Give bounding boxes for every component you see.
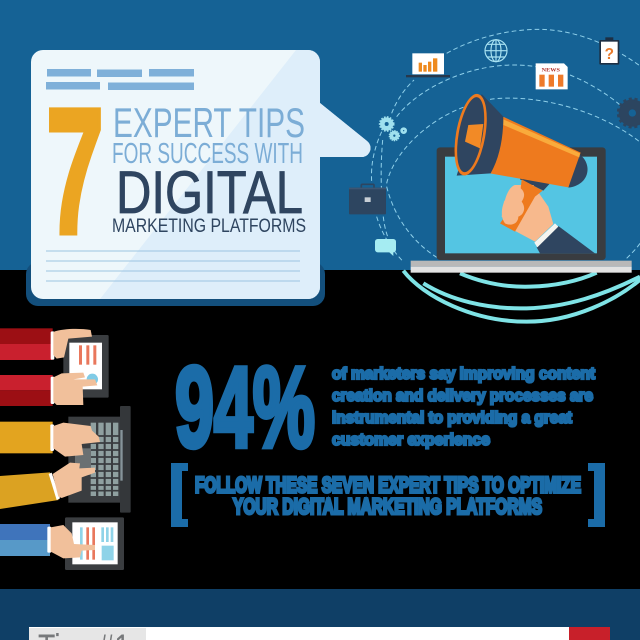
dark collar bbox=[457, 94, 503, 176]
laptop lid edge bbox=[120, 406, 131, 513]
blue sleeve bbox=[0, 524, 50, 540]
card shadow bbox=[26, 262, 325, 306]
megaphone bbox=[449, 91, 588, 188]
card diagonal sheen bbox=[100, 50, 371, 299]
tablet screen bbox=[69, 343, 102, 389]
cyan signal waves below laptop bbox=[403, 271, 640, 322]
title line: expert tips: EXPERT TIPS bbox=[113, 99, 305, 146]
cuffs bbox=[51, 331, 54, 360]
keyboard keys bbox=[91, 423, 118, 496]
statistic description: of marketers say improving content bbox=[332, 365, 595, 383]
big numeral 7: 7 bbox=[46, 71, 104, 271]
jacket sleeve bbox=[537, 226, 595, 253]
bottom hand bbox=[53, 373, 97, 405]
icon: cyan gears bbox=[380, 117, 406, 141]
illustration: megaphone from laptop with orbiting icons bbox=[349, 29, 640, 322]
top hand bbox=[53, 329, 92, 359]
right bracket bbox=[588, 463, 605, 527]
mouth inner bbox=[452, 95, 489, 174]
lower hand bbox=[53, 463, 95, 498]
callout text bbox=[195, 472, 581, 519]
laptop screen frame bbox=[437, 147, 606, 260]
body highlight bbox=[503, 119, 580, 157]
mouth rim bbox=[449, 91, 492, 178]
icon: globe bbox=[485, 40, 507, 62]
statistic description: customer experience bbox=[332, 431, 490, 449]
megaphone handle mount bbox=[520, 173, 551, 191]
tablet screen bbox=[72, 522, 118, 564]
chart bars bbox=[79, 345, 96, 365]
top sleeve bbox=[0, 328, 53, 344]
callout: bracketed intro bbox=[171, 463, 605, 527]
statistic: 94%: 94% bbox=[175, 344, 315, 472]
bottom sleeve bbox=[0, 375, 53, 390]
title line: marketing platforms: MARKETING PLATFORMS bbox=[112, 216, 306, 237]
angled yellow sleeve bbox=[0, 472, 59, 509]
shirt cuff bbox=[534, 223, 558, 247]
straight yellow sleeve bbox=[0, 422, 53, 453]
tablet body bbox=[63, 335, 109, 398]
cuffs bbox=[50, 424, 54, 451]
statistic description: creation and delivery processes are bbox=[332, 387, 593, 405]
hand holding megaphone bbox=[500, 173, 595, 253]
hand back bbox=[502, 185, 553, 242]
ruled lines bbox=[46, 251, 300, 281]
rear cap bbox=[568, 153, 588, 188]
header placeholder bars bbox=[46, 69, 194, 90]
red accent block bbox=[569, 627, 610, 640]
laptop base bbox=[411, 261, 632, 273]
header bar white bbox=[29, 627, 610, 640]
icon: briefcase bbox=[349, 184, 386, 214]
panel: tip 1 header bbox=[29, 627, 610, 640]
card body with pointer bbox=[31, 50, 371, 299]
megaphone handle bbox=[500, 179, 543, 232]
hinge highlight bbox=[120, 430, 123, 481]
laptop deck bbox=[68, 417, 121, 503]
speaker cone bbox=[465, 124, 483, 148]
icon: news sheet bbox=[536, 63, 568, 89]
touch blob bbox=[87, 374, 98, 385]
icon: chat bubble bbox=[375, 239, 396, 256]
icon: question clipboard bbox=[599, 37, 619, 65]
laptop screen bbox=[445, 157, 597, 253]
icon: news sheet: NEWS bbox=[542, 68, 560, 74]
tablet with two red-sleeved hands bbox=[0, 328, 109, 406]
upper hand bbox=[53, 423, 100, 457]
statistic description bbox=[332, 365, 595, 449]
cuff bbox=[47, 527, 51, 553]
fingers bbox=[502, 185, 524, 225]
left bracket bbox=[171, 463, 188, 527]
tablet body bbox=[65, 517, 124, 570]
hand bbox=[51, 525, 95, 558]
dashed orbit arcs bbox=[371, 29, 640, 262]
icon: chart on small laptop bbox=[406, 53, 450, 77]
orange body bbox=[490, 116, 581, 187]
title line: digital: DIGITAL bbox=[116, 159, 303, 226]
trackpad bbox=[75, 448, 91, 475]
statistic description: instrumental to providing a great bbox=[332, 409, 572, 427]
illustration: hands using devices bbox=[0, 328, 131, 570]
key gaps bbox=[90, 436, 119, 491]
tip label background bbox=[29, 628, 146, 640]
panel: title speech-bubble card bbox=[26, 50, 371, 306]
title line: for success with: FOR SUCCESS WITH bbox=[112, 138, 303, 170]
tablet with blue-sleeved hand bbox=[0, 517, 124, 570]
icon: question clipboard: ? bbox=[605, 46, 614, 63]
keyboard with two yellow-sleeved hands bbox=[0, 406, 131, 513]
chart bars bbox=[80, 527, 114, 560]
icon: dark gear bbox=[618, 99, 640, 127]
